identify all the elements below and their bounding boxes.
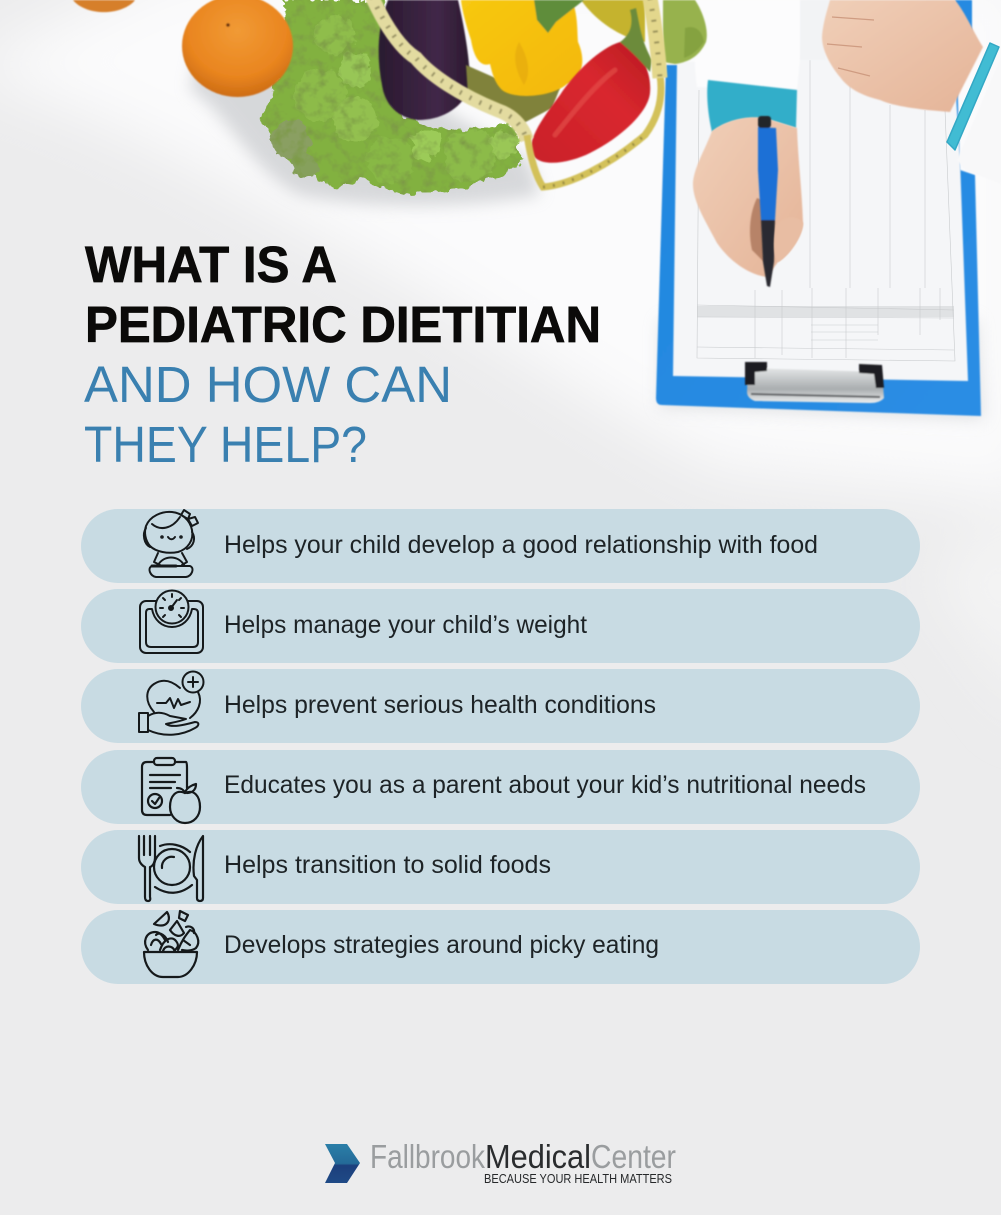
logo tagline: BECAUSE YOUR HEALTH MATTERS: [484, 1171, 672, 1186]
icon: salad bowl: [144, 911, 198, 977]
orange: [182, 0, 293, 97]
title: [84, 236, 601, 473]
text: row 6: Develops strategies around picky eating: [224, 931, 659, 959]
text: row 3: Helps prevent serious health conditions: [224, 691, 656, 719]
paper sheet: [673, 0, 968, 381]
pen: [758, 116, 778, 287]
olive leaves behind peppers: [466, 65, 560, 125]
logo wordmark: Fallbrook: [370, 1138, 485, 1175]
photo: clipboard, hands and pen: [656, 0, 1001, 420]
logo wordmark: Center: [591, 1138, 676, 1175]
row 4: educates parents: [81, 750, 920, 824]
lettuce: [261, 0, 522, 193]
coat fold between hands: [800, 0, 835, 60]
right hand: [822, 0, 983, 112]
icon: plate and cutlery: [139, 836, 203, 901]
metal clip: [745, 362, 884, 403]
finger holding pen: [774, 217, 803, 262]
logo chevron: [325, 1144, 360, 1183]
icon: weight scale: [140, 590, 203, 653]
row 2: manage weight: [81, 589, 920, 663]
right coat sleeve: [957, 57, 1001, 184]
benefits list: [81, 509, 920, 984]
left hand: [693, 117, 803, 277]
small orange at top edge: [73, 0, 135, 12]
eggplant: [379, 0, 470, 120]
title line 2: PEDIATRIC DIETITIAN: [85, 296, 601, 353]
text: row 4: Educates you as a parent about your kid’s nutritional needs: [224, 771, 866, 799]
food shadow: [190, 40, 540, 206]
clipboard board: [656, 0, 981, 416]
measuring tape: [372, 0, 661, 187]
icon: child eating: [144, 510, 198, 577]
row 1: good relationship with food: [81, 509, 920, 583]
row 6: picky eating: [81, 910, 920, 984]
text: row 5: Helps transition to solid foods: [224, 851, 551, 879]
photo: vegetables and measuring tape: [73, 0, 707, 206]
palm shadow beside pen: [750, 198, 764, 262]
background light sweep: [0, 0, 1001, 720]
row 3: prevent health conditions: [81, 669, 920, 743]
clipboard shadow: [660, 320, 984, 420]
text: row 1: Helps your child develop a good relationship with food: [224, 531, 818, 559]
teal wrist band: [947, 43, 999, 150]
yellow pepper: [461, 0, 584, 96]
icon: hand holding heart: [139, 672, 204, 735]
logo: Fallbrook Medical Center: [325, 1138, 676, 1186]
table shaded header: [697, 306, 954, 317]
logo wordmark: [370, 1138, 676, 1175]
icon: clipboard and apple: [142, 758, 200, 823]
red pepper: [531, 8, 652, 163]
left coat sleeve: [694, 0, 807, 90]
title line 1: WHAT IS A: [85, 236, 337, 293]
left teal cuff: [707, 80, 797, 132]
title line 4: THEY HELP?: [84, 416, 367, 473]
title line 3: AND HOW CAN: [84, 356, 452, 413]
row 5: solid foods: [81, 830, 920, 904]
text: row 2: Helps manage your child’s weight: [224, 611, 587, 639]
form lines on paper: [697, 60, 955, 361]
logo wordmark: Medical: [485, 1138, 591, 1175]
green pepper: [581, 0, 707, 64]
